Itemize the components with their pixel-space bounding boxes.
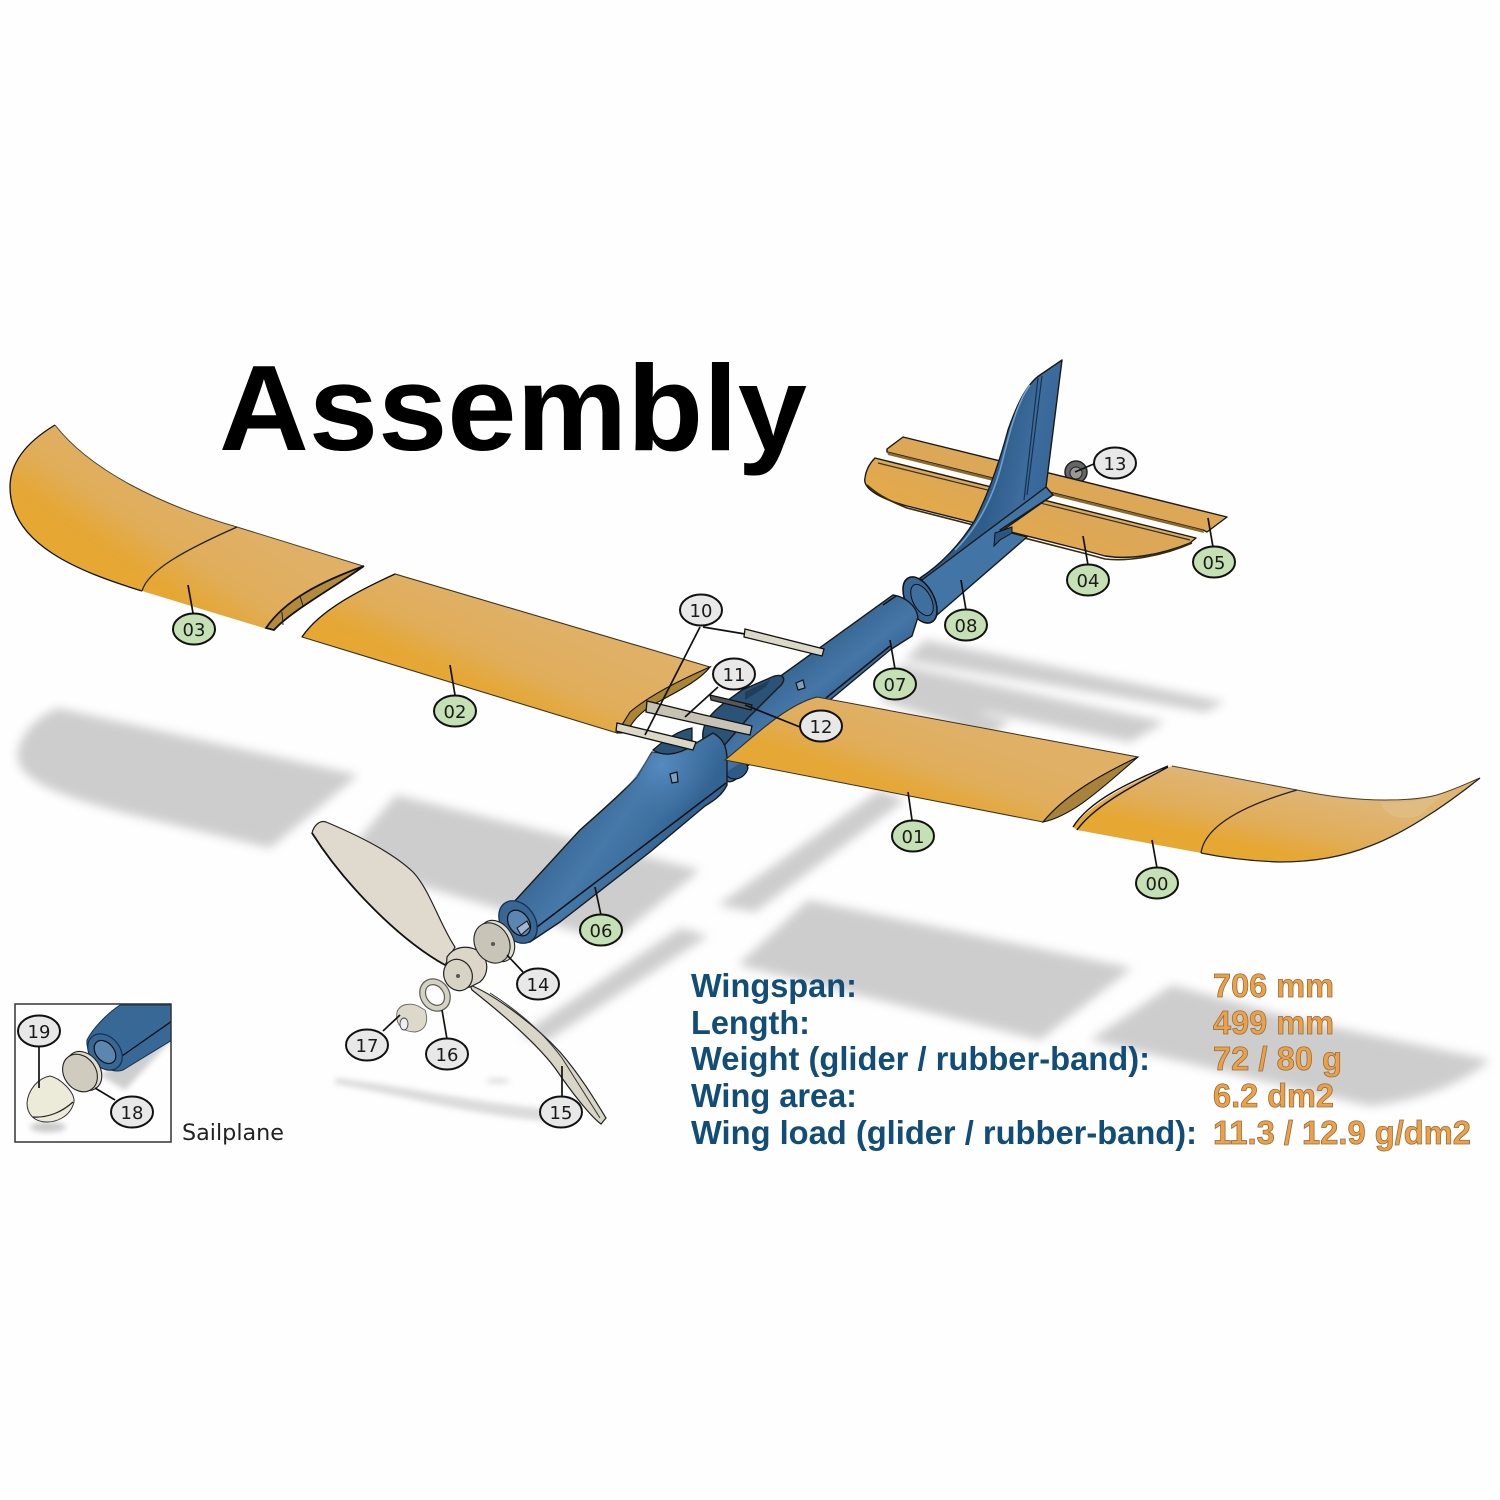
- propeller hub: [447, 947, 487, 987]
- label 06: [580, 914, 622, 946]
- specifications: values: 11.3 / 12.9 g/dm2: [1213, 1114, 1471, 1151]
- label 08: 08: [955, 616, 977, 637]
- label 14: [517, 968, 559, 1000]
- label 14: 14: [527, 975, 549, 996]
- part 06: nose fuselage: [491, 728, 727, 951]
- spar 10 upper: [744, 629, 824, 656]
- specifications: values: 72 / 80 g: [1213, 1040, 1342, 1077]
- label 05: [1193, 546, 1235, 578]
- part 08: tail boom and fin: [896, 360, 1062, 629]
- label 17: 17: [356, 1036, 378, 1057]
- boom joint ring: [896, 571, 944, 629]
- label 07: [874, 668, 916, 700]
- label 05: 05: [1203, 553, 1225, 574]
- label 13: [1094, 448, 1136, 478]
- part 16: retaining ring: [418, 977, 452, 1013]
- label 15: [540, 1096, 582, 1128]
- label 18: [111, 1096, 153, 1128]
- specifications: names: Length:: [691, 1004, 810, 1041]
- specifications: names: Weight (glider / rubber-band):: [691, 1040, 1150, 1077]
- specifications: values: 499 mm: [1213, 1004, 1334, 1041]
- nose face: [491, 893, 545, 951]
- propeller, part 15: [312, 822, 606, 1124]
- canopy opening: [653, 728, 692, 754]
- part 00: outer right wing: [1073, 766, 1480, 862]
- label 04: [1067, 564, 1109, 596]
- inset fuselage: [87, 1005, 172, 1071]
- spar 12: [710, 695, 752, 710]
- label 03: [173, 614, 215, 644]
- specifications: values: [1213, 967, 1471, 1151]
- label 12: [800, 710, 842, 742]
- ground shadows of the aircraft: [17, 640, 1490, 1122]
- label 16: 16: [436, 1045, 458, 1066]
- label 07: 07: [884, 675, 906, 696]
- label 01: 01: [902, 827, 924, 848]
- inset shadow: [102, 1042, 170, 1091]
- inset frame: [15, 1004, 171, 1142]
- part 13: rudder gear behind tail: [1065, 461, 1087, 483]
- inset disc 18: [69, 1050, 102, 1092]
- label 00: [1136, 868, 1178, 898]
- title: Assembly: [219, 340, 807, 476]
- part number labels: [18, 448, 1235, 1128]
- part 17: nose cap: [397, 1004, 427, 1032]
- label 04: 04: [1077, 571, 1099, 592]
- specifications: values: 706 mm: [1213, 967, 1334, 1004]
- specifications: names: Wing area:: [691, 1077, 857, 1114]
- specifications: names: Wingspan:: [691, 967, 857, 1004]
- inset caption: Sailplane: [182, 1121, 284, 1146]
- label 03: 03: [183, 620, 205, 641]
- label 06: 06: [590, 921, 612, 942]
- leader lines: [39, 463, 1213, 1100]
- label 10: [680, 594, 722, 626]
- spar 10 lower: [616, 723, 696, 750]
- part 04: horizontal stabiliser: [865, 458, 1196, 560]
- label 11: [713, 658, 755, 690]
- label 15: 15: [550, 1103, 572, 1124]
- label 12: 12: [810, 717, 832, 738]
- part 05: rear elevator: [887, 437, 1227, 533]
- inset nose cone 19: [27, 1076, 74, 1122]
- label 00: 00: [1146, 874, 1168, 895]
- specifications: names: [691, 967, 1197, 1151]
- part 03: outer left wing: [10, 425, 364, 630]
- specifications: names: Wing load (glider / rubber-band):: [691, 1114, 1197, 1151]
- part 01: inner right wing: [725, 697, 1138, 822]
- label 10: 10: [690, 601, 712, 622]
- spars: parts 10, 11, 12: [616, 629, 824, 750]
- part 07: mid fuselage: [703, 595, 918, 782]
- label 19: [18, 1016, 60, 1046]
- part 02: inner left wing: [302, 574, 710, 733]
- label 17: [346, 1030, 388, 1060]
- wing saddle: [703, 675, 784, 748]
- spar 11: [646, 701, 752, 735]
- label 16: [426, 1038, 468, 1070]
- label 02: [434, 696, 476, 726]
- label 13: 13: [1104, 454, 1126, 475]
- label 11: 11: [723, 665, 745, 686]
- label 01: [892, 820, 934, 852]
- part 14: spinner disc: [467, 914, 522, 970]
- specifications: values: 6.2 dm2: [1213, 1077, 1334, 1114]
- label 08: [945, 610, 987, 640]
- label 02: 02: [444, 702, 466, 723]
- boom body: [922, 487, 1053, 615]
- label 18: 18: [121, 1103, 143, 1124]
- inset: sailplane nose: [15, 1004, 172, 1142]
- label 19: 19: [28, 1022, 50, 1043]
